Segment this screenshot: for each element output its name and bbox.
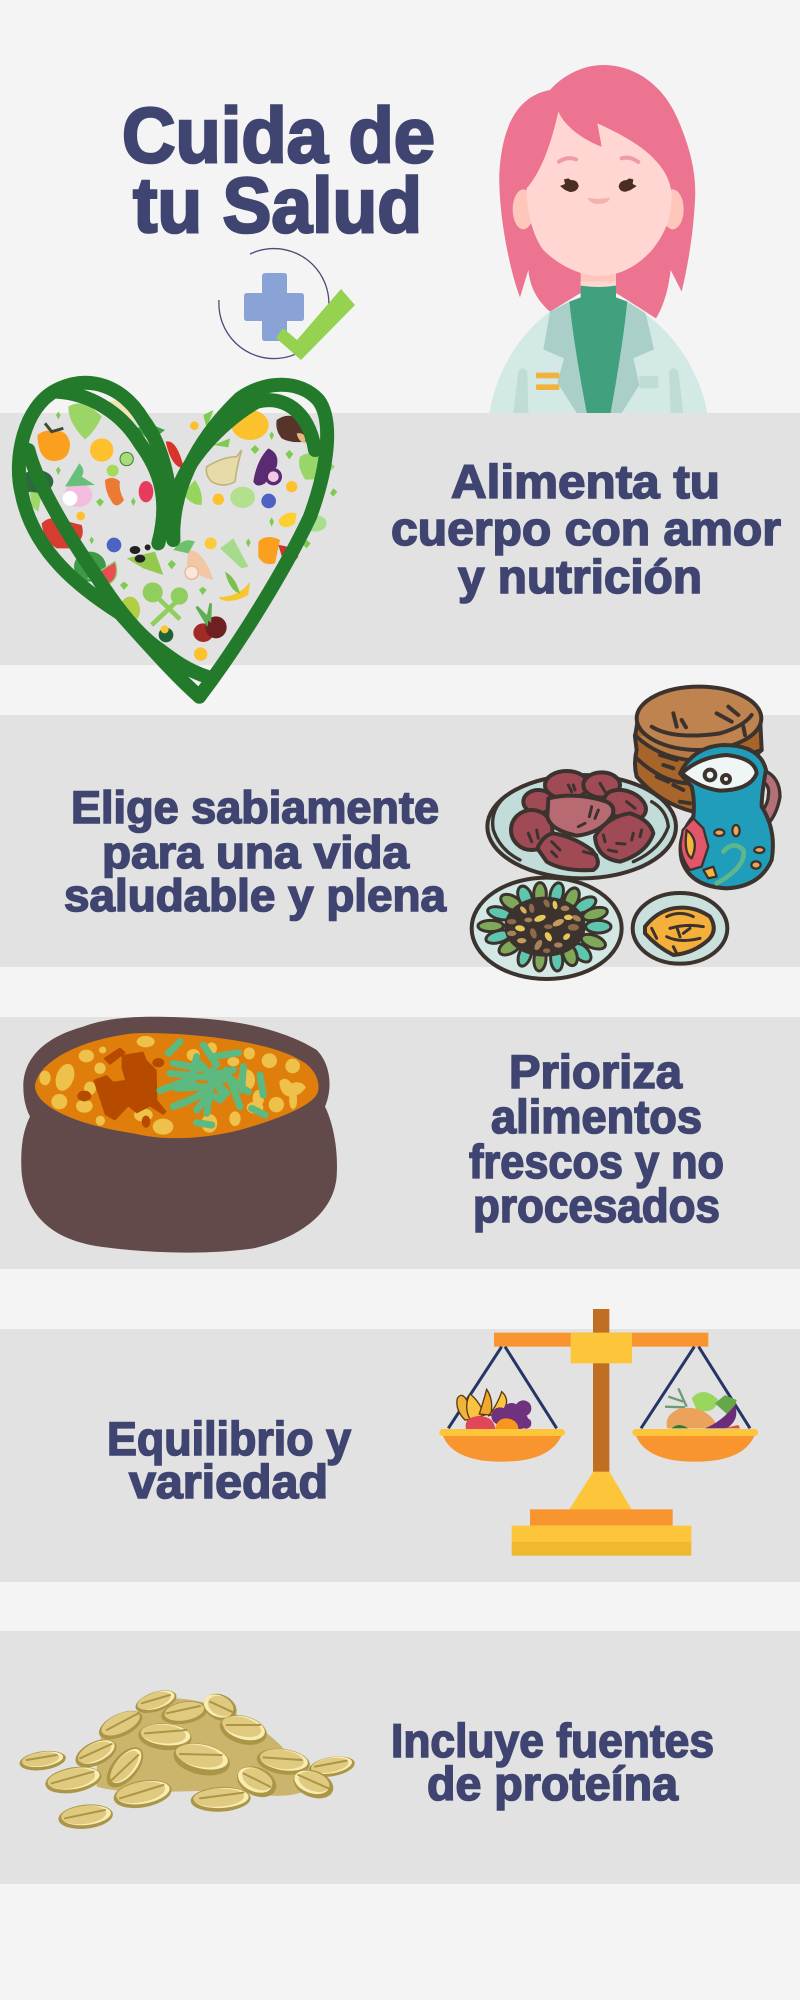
heading: elige	[64, 782, 447, 921]
heading: elige: Elige sabiamente	[71, 782, 439, 833]
melon	[120, 597, 140, 623]
tomato	[42, 518, 83, 548]
title: Cuida de	[122, 91, 435, 179]
olives	[127, 552, 163, 575]
blue flower 2	[261, 494, 276, 508]
oat creases	[27, 1695, 347, 1818]
lettuce 2	[183, 480, 202, 505]
leaves small	[173, 540, 195, 553]
illustration: heart of vegetables	[19, 383, 337, 697]
ears	[513, 189, 534, 229]
hair	[499, 65, 695, 318]
eyebrows	[559, 158, 638, 162]
blue flower 1	[107, 538, 121, 552]
turnip	[64, 483, 92, 507]
heading: prioriza: alimentos	[491, 1090, 702, 1143]
coat	[489, 302, 707, 413]
mouth	[587, 198, 610, 204]
jug	[680, 745, 773, 888]
chili	[166, 441, 184, 468]
base	[569, 1472, 632, 1509]
heading: alimenta: y nutrición	[458, 550, 702, 603]
melon top	[231, 410, 269, 440]
illustration: balance scale	[439, 1309, 758, 1556]
illustration: doctor	[489, 65, 707, 413]
badge	[536, 373, 559, 378]
heading: elige: saludable y plena	[64, 870, 447, 921]
salad centre	[504, 897, 586, 957]
heading: prioriza: Prioriza	[509, 1045, 683, 1098]
dark flower	[159, 628, 173, 642]
icon: medical cross with check	[219, 249, 355, 360]
beam	[494, 1333, 708, 1347]
meat chunks	[77, 1047, 167, 1128]
right pan	[636, 1435, 755, 1462]
big plate	[487, 775, 676, 878]
left fruit	[457, 1389, 531, 1429]
neck	[581, 260, 616, 288]
pumpkin	[37, 431, 70, 461]
artichoke cross	[152, 595, 180, 625]
eyes	[560, 178, 579, 192]
title: tu Salud	[133, 161, 422, 249]
panel: band 5	[0, 1631, 800, 1884]
heading: equilibrio: Equilibrio y	[107, 1412, 351, 1465]
illustration: pot of stew	[21, 1017, 337, 1253]
heading: alimenta	[391, 455, 781, 603]
face	[527, 112, 672, 276]
strings	[448, 1347, 750, 1428]
jug decoration	[681, 818, 708, 870]
right vegetables	[665, 1388, 740, 1428]
panel: band 2	[0, 715, 800, 967]
potato	[187, 550, 213, 580]
small plate	[633, 893, 727, 964]
heart strokes	[19, 383, 327, 697]
heading: alimenta: Alimenta tu	[451, 455, 720, 508]
jug handle	[762, 770, 780, 827]
banana pod	[218, 582, 250, 601]
cucumber	[120, 452, 133, 466]
flower right	[205, 537, 217, 549]
panel: band 4	[0, 1329, 800, 1582]
illustration: oats pile	[18, 1686, 356, 1831]
carrot	[105, 478, 124, 505]
heading: equilibrio	[107, 1412, 351, 1508]
small dark broccoli	[20, 470, 53, 493]
salad petals	[478, 881, 611, 971]
mushroom	[276, 416, 315, 442]
heading: equilibrio: variedad	[129, 1455, 328, 1508]
turtleneck	[569, 286, 627, 413]
heading: prioriza	[469, 1045, 724, 1232]
oats	[133, 1686, 179, 1717]
beet	[193, 623, 213, 642]
green herbs	[160, 1042, 265, 1125]
eggplant	[253, 448, 277, 485]
small flowers	[213, 494, 224, 505]
coat sleeve lines	[513, 368, 683, 413]
garlic	[108, 400, 137, 428]
cabbage	[230, 487, 255, 508]
lettuce	[68, 403, 102, 439]
radish	[139, 481, 153, 502]
panel: band 3	[0, 1017, 800, 1269]
herb	[137, 423, 165, 442]
meat pieces	[511, 771, 653, 870]
pocket	[639, 376, 658, 388]
heading: incluye: Incluye fuentes	[391, 1714, 714, 1767]
panel: band 1	[0, 413, 800, 665]
soup	[35, 1033, 319, 1138]
heading: prioriza: frescos y no	[469, 1135, 724, 1188]
stacked bread	[635, 717, 762, 812]
lapels	[543, 302, 587, 413]
illustration: plates and jug	[472, 687, 780, 979]
beans	[39, 1036, 306, 1135]
stem	[593, 1309, 609, 1472]
left pan	[443, 1435, 562, 1462]
flower	[90, 438, 113, 462]
gourd	[206, 450, 242, 485]
heading: prioriza: procesados	[473, 1179, 720, 1232]
heading: elige: para una vida	[102, 827, 410, 878]
heading: incluye	[391, 1714, 714, 1810]
salad plate	[472, 878, 622, 979]
corn	[170, 660, 195, 680]
right side greens	[299, 453, 335, 480]
title	[122, 91, 435, 249]
watermelon	[74, 552, 106, 582]
yellow flower bottom	[194, 647, 207, 661]
heading: alimenta: cuerpo con amor	[391, 502, 781, 555]
pepper	[258, 537, 280, 564]
heading: incluye: de proteína	[427, 1757, 679, 1810]
